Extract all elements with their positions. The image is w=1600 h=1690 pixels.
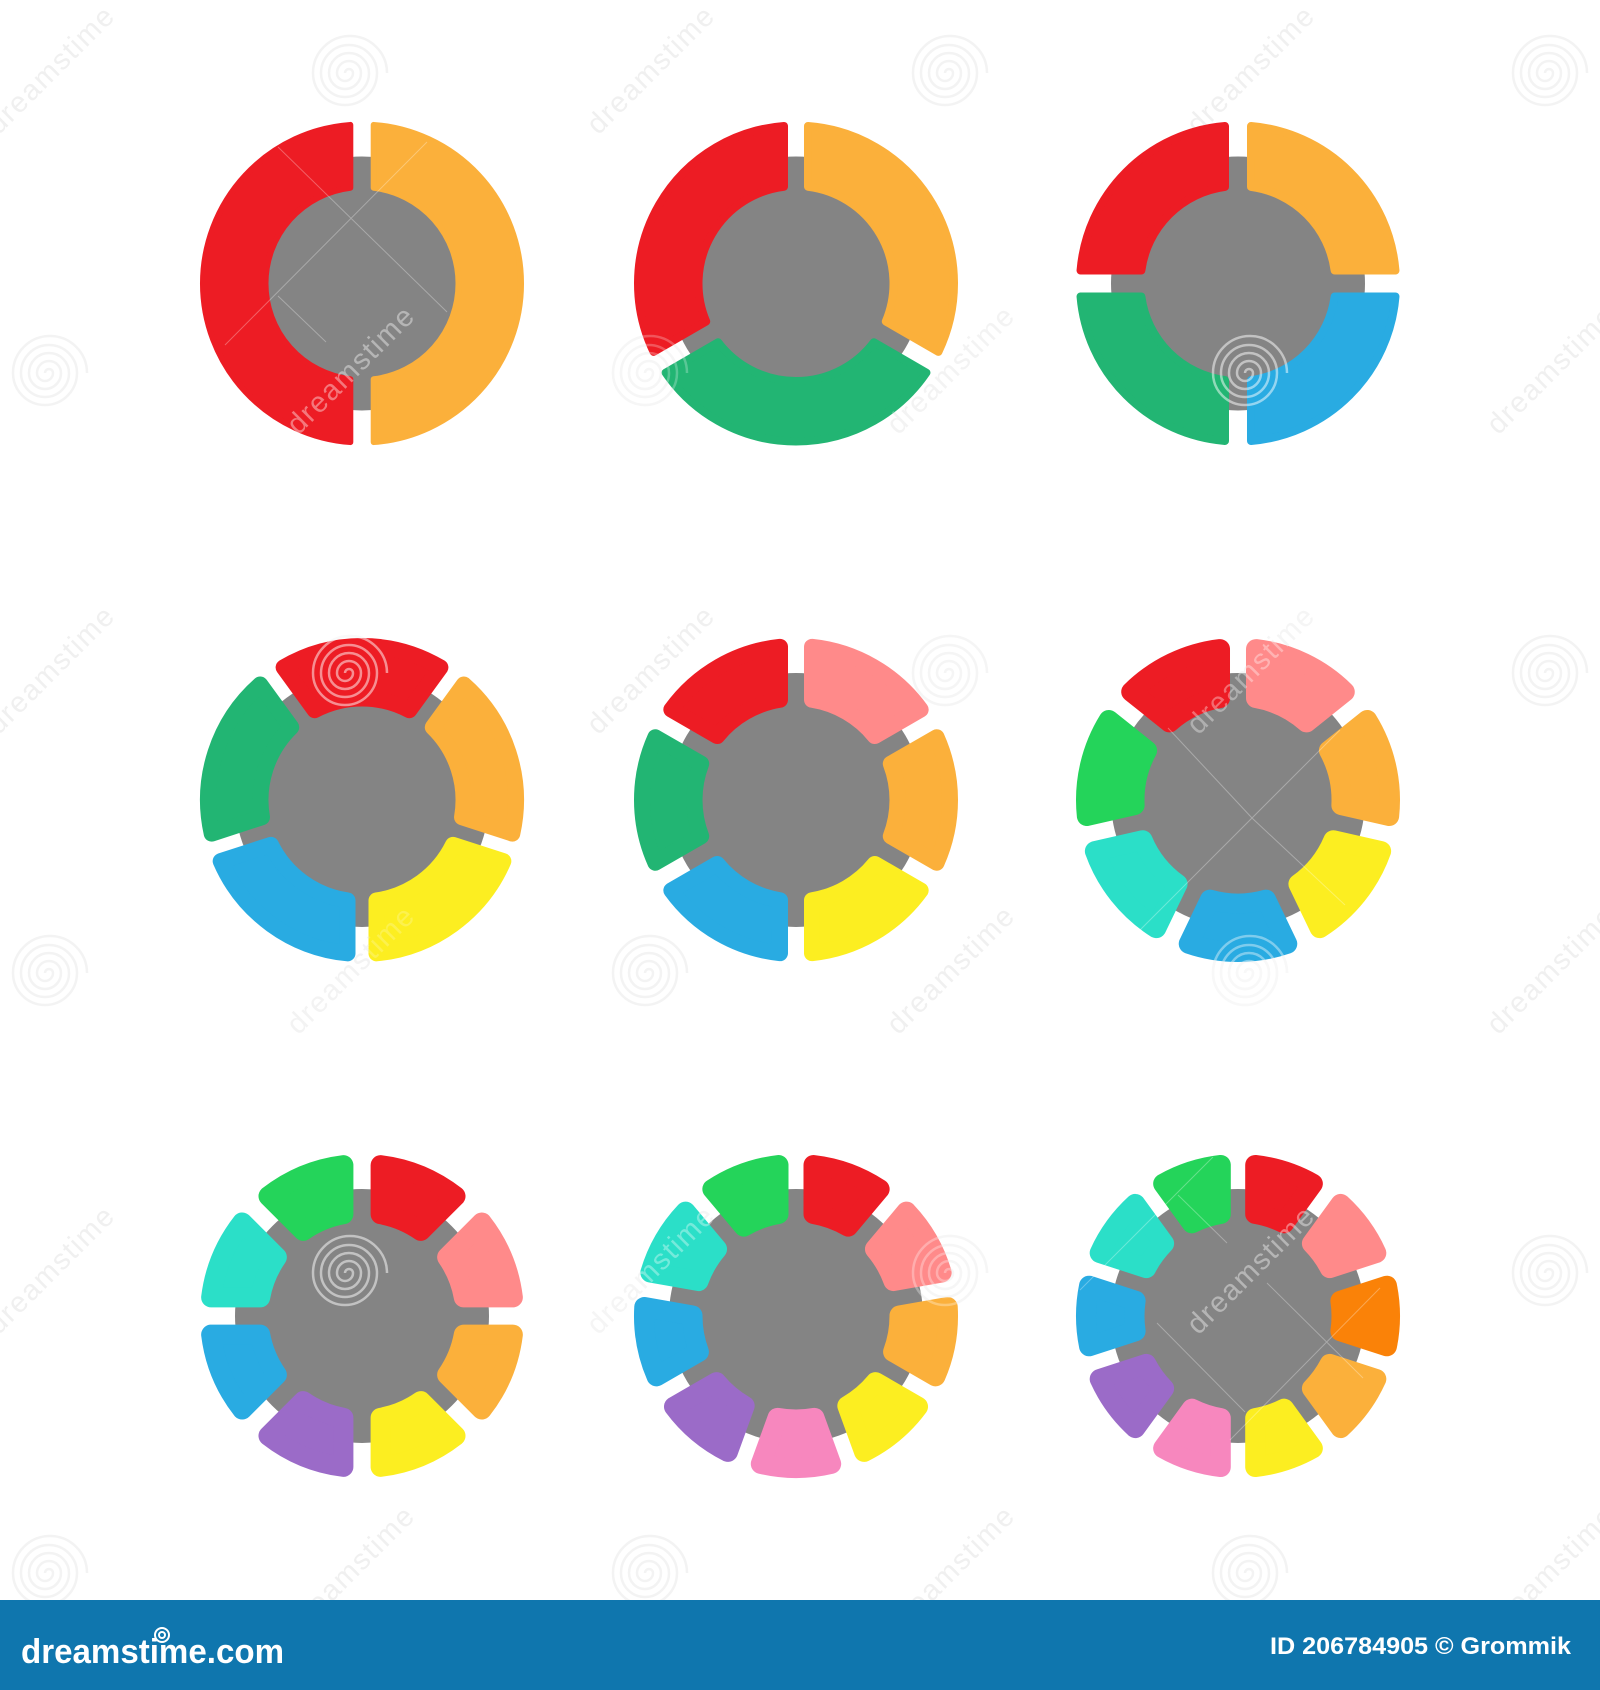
chart: 9 segments: [640, 1161, 952, 1468]
watermark overlay on charts: dreamstime: [881, 301, 1021, 441]
segment: green: [642, 737, 701, 863]
segment: dark orange: [1340, 1286, 1390, 1346]
segment: yellow: [834, 1371, 921, 1455]
segment: salmon: [867, 1210, 945, 1296]
chart: 6 segments: [642, 635, 950, 965]
watermark layer on white: dreamstime: [281, 301, 421, 441]
segment: salmon: [1303, 1202, 1379, 1280]
watermark overlay on charts: dreamstime: [1181, 1201, 1321, 1341]
segment: red: [665, 635, 803, 749]
chart: 3 segments: [594, 92, 998, 442]
watermark layer on white: dreamstime: [581, 1201, 721, 1341]
watermark layer on white: dreamstime: [881, 1501, 1021, 1641]
segment: teal: [1097, 1202, 1173, 1280]
segment: orange: [1221, 100, 1422, 301]
segment: red: [1241, 1162, 1314, 1228]
segment: yellow: [1285, 824, 1388, 933]
segment: green: [1054, 266, 1255, 467]
chart: 2 segments: [203, 125, 521, 442]
centre disc: [669, 673, 923, 927]
centre disc: [235, 1189, 489, 1443]
footer logo text: dreamstime.com: [21, 1633, 284, 1671]
segment: red: [1128, 642, 1239, 732]
segment: orange: [890, 1299, 952, 1377]
segment: red: [203, 125, 350, 442]
footer image id: ID 206784905 © Grommik: [1270, 1633, 1572, 1660]
segment: orange: [423, 678, 533, 847]
segment: green: [1162, 1162, 1235, 1228]
segment: teal: [647, 1210, 725, 1296]
segment: green: [191, 678, 301, 847]
segment: red: [363, 1160, 458, 1238]
watermark layer on white: dreamstime: [581, 601, 721, 741]
segment: blue: [665, 851, 803, 965]
watermark layer on white: dreamstime: [281, 1501, 421, 1641]
segment: blue: [1221, 266, 1422, 467]
watermark layer on white: dreamstime: [881, 901, 1021, 1041]
centre disc: [235, 673, 489, 927]
segment: blue: [640, 1299, 702, 1377]
watermark overlay on charts: dreamstime: [1181, 601, 1321, 741]
segment: purple: [671, 1371, 758, 1455]
segment: pink: [1162, 1404, 1235, 1470]
watermark overlay on charts: dreamstime: [281, 901, 421, 1041]
watermark layer on white: dreamstime: [581, 1, 721, 141]
watermark layer on white: dreamstime: [881, 301, 1021, 441]
watermark layer on white: dreamstime: [1181, 1, 1321, 141]
watermark overlay on charts: dreamstime: [281, 301, 421, 441]
segment: red: [284, 646, 440, 710]
segment: teal: [206, 1220, 284, 1315]
segment: orange: [891, 737, 950, 863]
watermark layer on white: dreamstime: [1181, 601, 1321, 741]
segment: green: [666, 342, 926, 442]
segment: green: [266, 1160, 361, 1238]
watermark overlay on charts: dreamstime: [581, 1201, 721, 1341]
centre disc: [669, 1189, 923, 1443]
segment: teal: [1088, 824, 1191, 933]
chart: 10 segments: [1086, 1162, 1390, 1470]
segment: orange: [782, 92, 998, 367]
segment: yellow: [1241, 1404, 1314, 1470]
segment: purple: [1097, 1352, 1173, 1430]
segment: yellow: [351, 827, 516, 971]
segment: blue: [1086, 1286, 1136, 1346]
chart: 8 segments: [206, 1160, 518, 1472]
segment: salmon: [440, 1220, 518, 1315]
segment: blue: [206, 1317, 284, 1412]
segment: blue: [208, 827, 373, 971]
segment: red: [594, 92, 810, 367]
centre disc: [235, 156, 489, 410]
segment: pink: [761, 1418, 831, 1468]
watermark layer on white: dreamstime: [281, 901, 421, 1041]
chart: 5 segments: [191, 646, 533, 971]
segment: salmon: [789, 635, 927, 749]
footer bar: [0, 1600, 1600, 1690]
segment: orange: [1324, 718, 1397, 826]
segment: orange: [440, 1317, 518, 1412]
segment: yellow: [789, 851, 927, 965]
segment: blue: [1189, 900, 1287, 952]
segment: purple: [266, 1394, 361, 1472]
segment: red: [1054, 100, 1255, 301]
centre disc: [1111, 673, 1365, 927]
watermark layer on white: dreamstime: [1181, 1201, 1321, 1341]
watermark overlay on charts: [225, 142, 1380, 1440]
segment: green: [1079, 718, 1152, 826]
chart: 4 segments: [1054, 100, 1422, 467]
icon: logo spiral: [155, 1628, 169, 1642]
centre disc: [669, 156, 923, 410]
centre disc: [1111, 156, 1365, 410]
chart: 7 segments: [1079, 642, 1397, 952]
segment: salmon: [1237, 642, 1348, 732]
segment: green: [711, 1161, 794, 1232]
centre disc: [1111, 1189, 1365, 1443]
segment: orange: [1303, 1352, 1379, 1430]
segment: yellow: [363, 1394, 458, 1472]
segment: red: [798, 1161, 881, 1232]
segment: orange: [374, 125, 521, 442]
